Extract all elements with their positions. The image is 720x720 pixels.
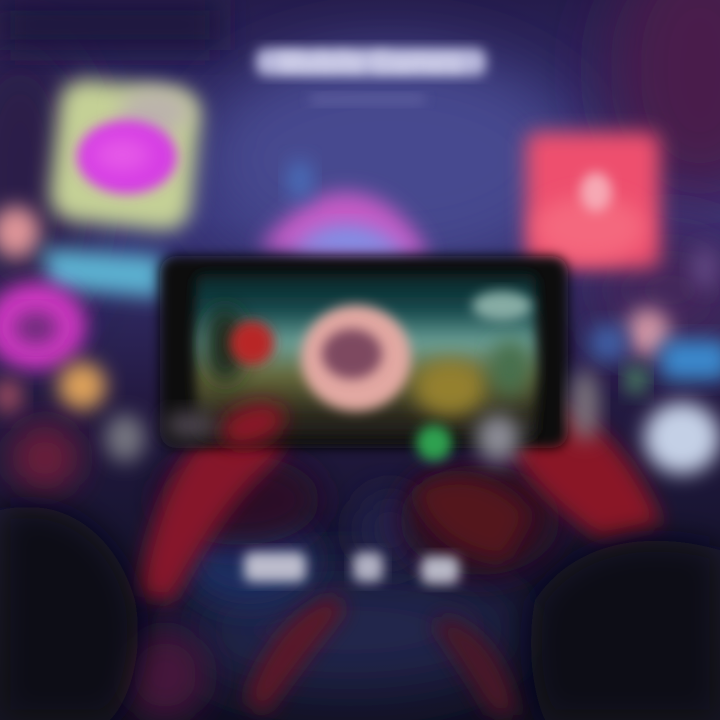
hands: dark arms under phone — [123, 400, 662, 719]
dark foreground: left shoulder — [0, 507, 138, 720]
icon: tilted green app tile — [47, 77, 203, 233]
lower labels — [244, 552, 459, 584]
title: Mobile Games — [278, 47, 462, 77]
game button: red — [230, 321, 274, 365]
subtitle — [310, 94, 425, 105]
phone — [160, 256, 568, 461]
floating icons: left side — [0, 206, 162, 492]
dark foreground: right shoulder — [531, 541, 720, 720]
phone screen — [196, 274, 536, 438]
floating icons: right side — [590, 246, 720, 474]
game button: pink ring — [301, 305, 411, 411]
dome shape above phone — [258, 160, 430, 262]
game button: green — [416, 425, 452, 461]
phone body — [160, 256, 568, 448]
icon: pink app tile — [526, 132, 660, 268]
thumbs — [164, 369, 599, 462]
